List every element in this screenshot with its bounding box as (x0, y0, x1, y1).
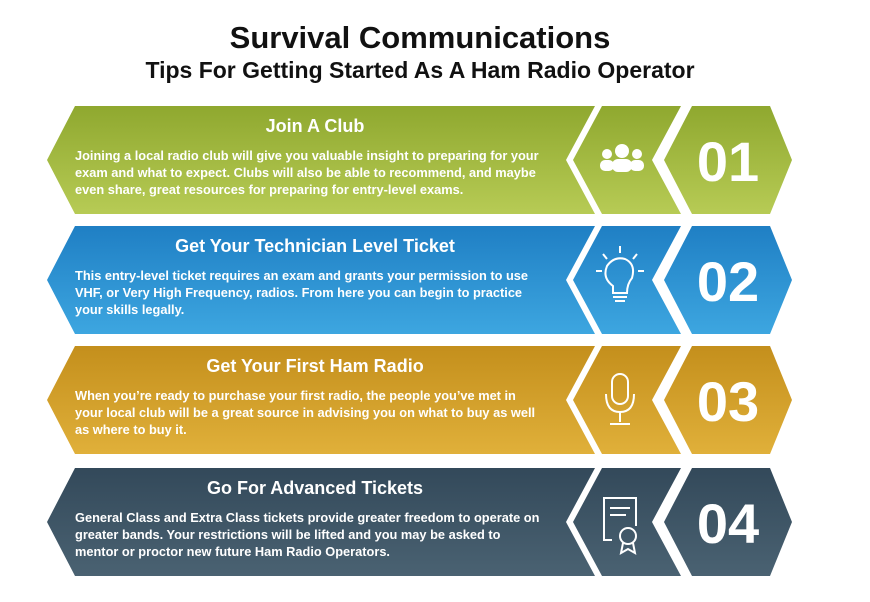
panel: advanced tickets: greater bands. Your restrictions will be lifted and you may be asked to (75, 527, 501, 542)
title: Survival Communications (230, 20, 610, 55)
panel: first ham radio: your local club will be a great source in advising you on what to buy as well (75, 405, 535, 420)
panel: technician ticket: your skills legally. (75, 302, 184, 317)
panel: first ham radio: When you’re ready to purchase your first radio, the people you’ve met in (75, 388, 516, 403)
panel: join a club: 01 (697, 130, 759, 193)
panel: advanced tickets: mentor or proctor new future Ham Radio Operators. (75, 544, 390, 559)
panel: first ham radio: as where to buy it. (75, 422, 187, 437)
panel: advanced tickets: General Class and Extra Class tickets provide greater freedom to operate on (75, 510, 540, 525)
panel: join a club: Join A Club (266, 116, 364, 136)
subtitle: Tips For Getting Started As A Ham Radio Operator (145, 57, 695, 83)
panel: join a club: exam and what to expect. Clubs will also be able to recommend, and maybe (75, 165, 536, 180)
panel: join a club: even share, great resources for preparing for entry-level exams. (75, 182, 463, 197)
panel: first ham radio: 03 (697, 370, 759, 433)
panel: technician ticket: VHF, or Very High Frequency, radios. From here you can begin to practice (75, 285, 522, 300)
panel: advanced tickets (47, 468, 792, 576)
panel: first ham radio: Get Your First Ham Radio (206, 356, 424, 376)
panel: advanced tickets: 04 (697, 492, 759, 555)
panel: join a club (47, 106, 792, 214)
panel: technician ticket: Get Your Technician Level Ticket (175, 236, 455, 256)
panel: technician ticket (47, 226, 792, 334)
panel: join a club: Joining a local radio club will give you valuable insight to preparing for your (75, 148, 539, 163)
panel: first ham radio (47, 346, 792, 454)
panel: advanced tickets: Go For Advanced Tickets (207, 478, 423, 498)
panel: technician ticket: This entry-level ticket requires an exam and grants your permission to use (75, 268, 528, 283)
panel: technician ticket: 02 (697, 250, 759, 313)
